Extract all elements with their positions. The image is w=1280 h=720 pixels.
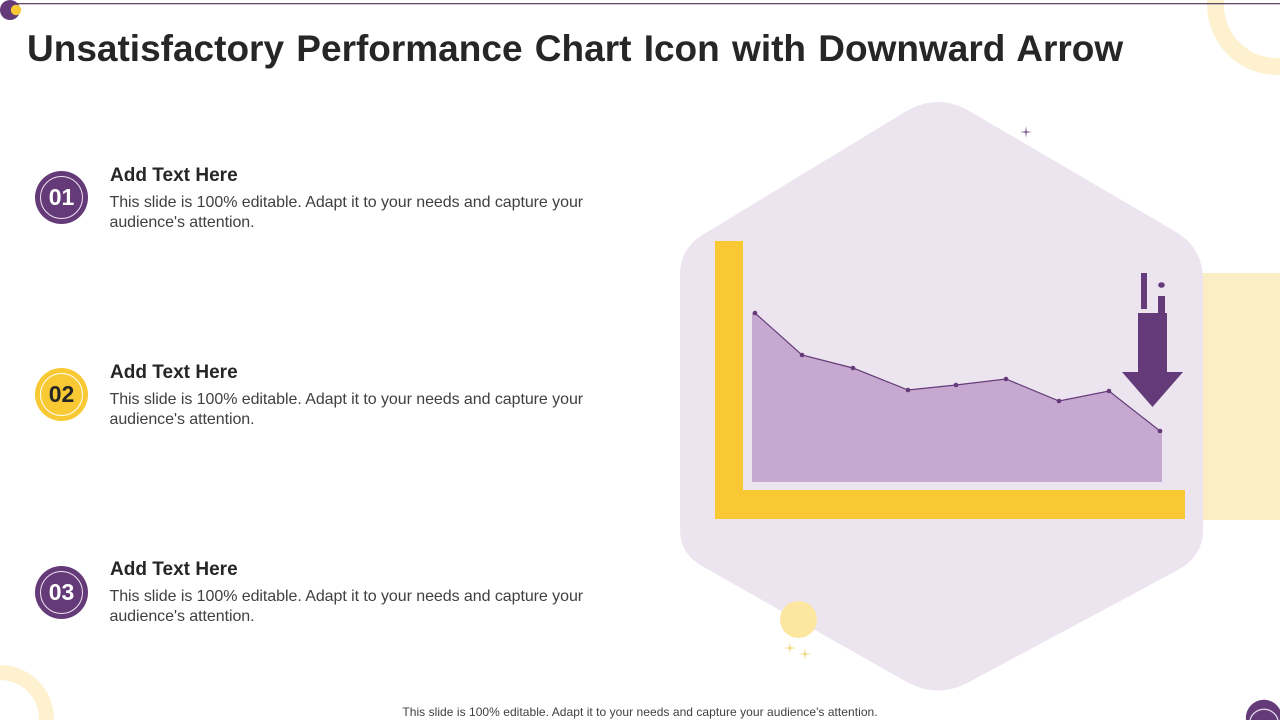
badge 03: 03: [49, 579, 74, 605]
pale yellow circle: [780, 601, 817, 638]
badge 03: [35, 566, 88, 619]
heading 01: Add Text Here: [110, 165, 238, 186]
footer note: This slide is 100% editable. Adapt it to your needs and capture your audience's attention.: [402, 705, 878, 719]
text 01: This slide is 100% editable. Adapt it to your needs and capture your: [110, 194, 583, 211]
pale yellow rectangle behind hexagon: [1190, 273, 1280, 520]
text 01: audience's attention.: [110, 214, 255, 230]
sparkles: yellow: [784, 642, 811, 660]
chart axes: [715, 241, 1185, 519]
trend line with points: [753, 311, 1162, 433]
heading 02: Add Text Here: [110, 362, 238, 383]
corner badge: bottom right: [1246, 700, 1280, 720]
text 03: [110, 588, 583, 624]
badge 01: 01: [49, 184, 74, 210]
icon: downward arrow: [1122, 273, 1183, 407]
corner ring: top right: [1207, 0, 1280, 75]
header rule: [14, 3, 1280, 4]
area chart: [715, 241, 1185, 519]
sparkle: top: [1020, 126, 1032, 138]
badge 02: [35, 368, 88, 421]
text 01: [110, 194, 583, 230]
badge 02: 02: [49, 381, 74, 407]
badge 01: [35, 171, 88, 224]
corner ring: bottom left: [0, 665, 54, 720]
area fill: [752, 313, 1162, 482]
hexagon background: [680, 102, 1203, 690]
list item 03: [35, 559, 583, 624]
list item 02: [35, 362, 583, 428]
text 02: This slide is 100% editable. Adapt it to your needs and capture your: [110, 391, 583, 408]
heading 03: Add Text Here: [110, 559, 238, 580]
text 02: audience's attention.: [110, 410, 255, 428]
text 02: [110, 391, 583, 428]
list item 01: [35, 165, 583, 230]
title: Unsatisfactory Performance Chart Icon with Downward Arrow: [27, 28, 1123, 69]
corner dot: top left: [0, 0, 21, 20]
text 03: This slide is 100% editable. Adapt it to your needs and capture your: [110, 588, 583, 605]
text 03: audience's attention.: [110, 608, 255, 624]
